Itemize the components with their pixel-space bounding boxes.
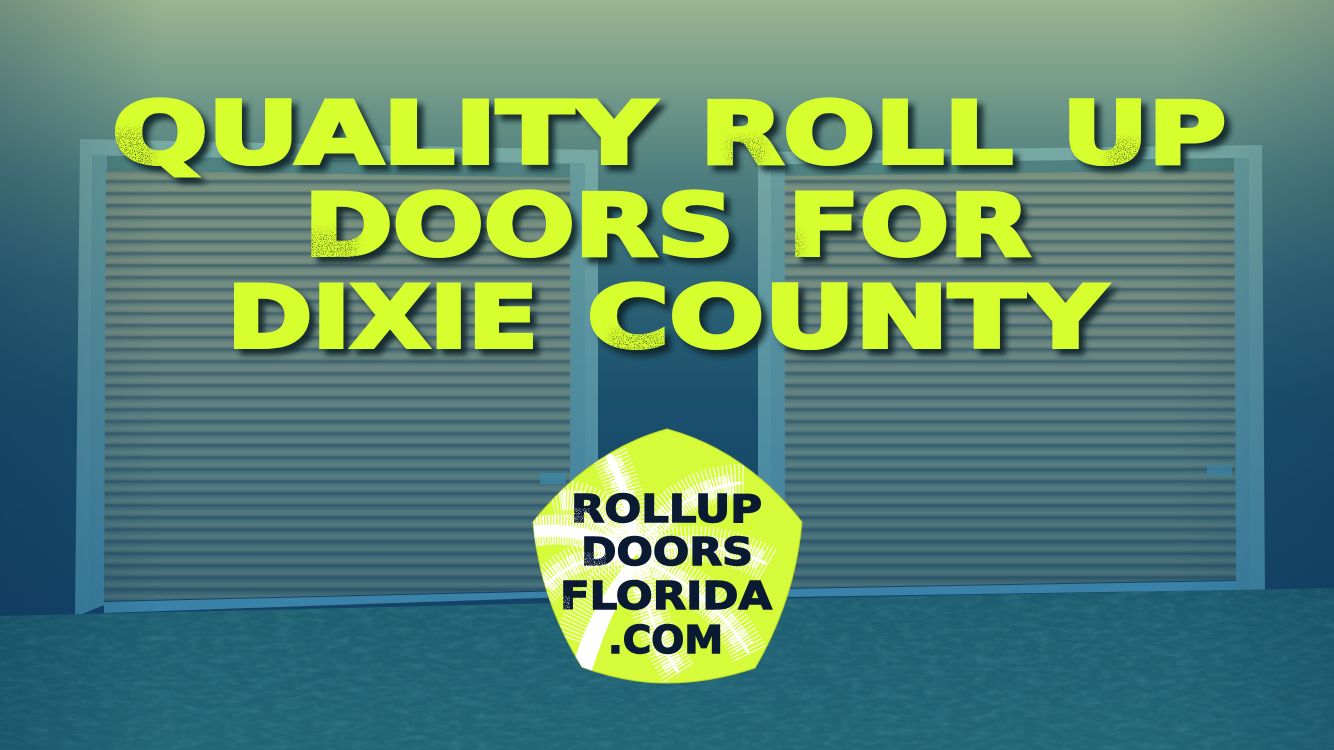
left door curtain bbox=[104, 170, 570, 601]
right door head band bbox=[785, 158, 1234, 178]
right door frame bbox=[758, 145, 1265, 600]
logo grunge texture: FLORIDA bbox=[560, 574, 773, 618]
logo line: .COM: .COM bbox=[608, 618, 723, 662]
title line 2: FOR bbox=[788, 176, 1030, 276]
right door jamb shading bbox=[771, 158, 1250, 598]
logo line: DOORS: DOORS bbox=[581, 530, 753, 574]
title line 2 bbox=[304, 176, 1030, 276]
title line 1: ROLL bbox=[700, 84, 1013, 184]
background: grass bbox=[0, 585, 1334, 750]
panel: left roll up door bbox=[75, 139, 598, 617]
logo line: FLORIDA: FLORIDA bbox=[560, 574, 773, 618]
title line 3: DIXIE bbox=[227, 268, 538, 368]
title grunge texture: UP bbox=[1062, 84, 1226, 184]
title bbox=[112, 84, 1226, 368]
left door frame bbox=[75, 139, 598, 617]
title line 3 bbox=[227, 268, 1108, 368]
logo grunge texture: DOORS bbox=[581, 530, 753, 574]
title line 2: DOORS bbox=[304, 176, 734, 276]
left door jamb shading bbox=[89, 155, 585, 611]
title grunge texture bbox=[115, 122, 1141, 350]
title line 1 bbox=[112, 84, 1226, 184]
left door latch bbox=[540, 473, 566, 484]
title line 1: QUALITY bbox=[112, 84, 657, 184]
title grunge texture: FOR bbox=[788, 176, 1030, 276]
left door bottom rail bbox=[104, 591, 598, 613]
logo grunge texture: ROLLUP bbox=[571, 487, 762, 531]
title grunge texture: QUALITY bbox=[112, 84, 657, 184]
right door latch bbox=[1207, 465, 1232, 476]
logo line: ROLLUP: ROLLUP bbox=[571, 487, 762, 531]
title grunge texture: COUNTY bbox=[587, 268, 1108, 368]
right door curtain bbox=[785, 170, 1236, 588]
title line 1: UP bbox=[1062, 84, 1226, 184]
panel: right roll up door bbox=[758, 145, 1265, 600]
icon: palm tree bbox=[533, 452, 768, 677]
right door bottom rail bbox=[785, 581, 1236, 597]
logo grunge texture bbox=[563, 508, 606, 610]
left door slats bbox=[104, 170, 570, 601]
logo badge bbox=[533, 429, 802, 683]
title line 3: COUNTY bbox=[587, 268, 1108, 368]
title grunge texture: DOORS bbox=[304, 176, 734, 276]
badge shape bbox=[533, 429, 802, 683]
right door slats bbox=[785, 170, 1236, 588]
logo text bbox=[560, 487, 773, 662]
left door head band bbox=[107, 156, 570, 180]
title grunge texture: ROLL bbox=[700, 84, 1013, 184]
